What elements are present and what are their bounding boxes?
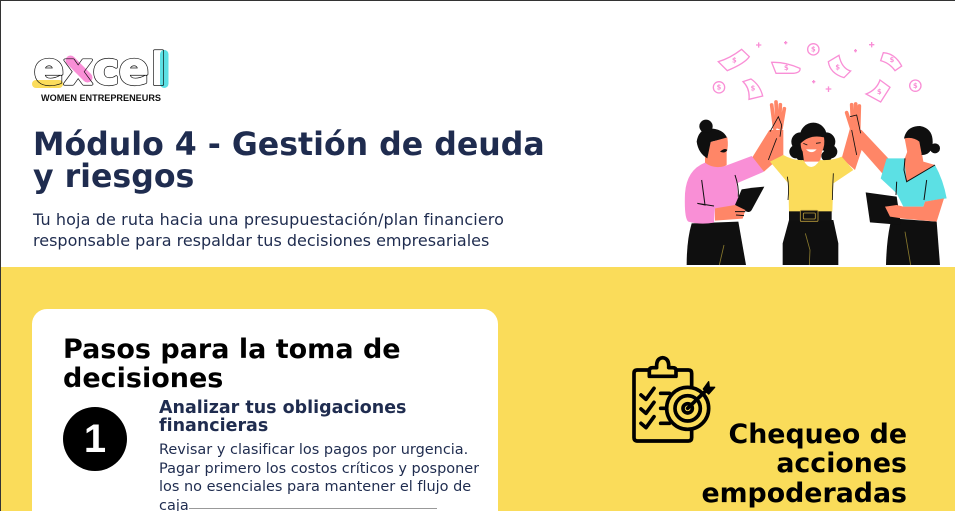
step heading	[159, 398, 406, 436]
clapping hands	[768, 102, 861, 160]
illustration: women high-fiving with flying money: $	[913, 82, 918, 90]
step number badge: 1	[84, 417, 106, 461]
heading: empowered actions check: empoderadas	[701, 478, 907, 509]
card heading: decisiones	[63, 363, 223, 394]
woman left	[685, 120, 785, 265]
step heading: financieras	[159, 416, 268, 436]
illustration: women high-fiving with flying money: $	[717, 84, 722, 92]
illustration: women high-fiving with flying money: $	[811, 46, 816, 54]
step description: Pagar primero los costos críticos y posponer	[159, 460, 479, 476]
title: Módulo 4 - Gestión de deuda	[33, 127, 545, 163]
step heading: Analizar tus obligaciones	[159, 398, 406, 418]
step description	[159, 442, 479, 511]
heading: empowered actions check	[701, 420, 907, 509]
woman right	[866, 126, 947, 265]
intro text: Tu hoja de ruta hacia una presupuestación/plan financiero	[33, 210, 504, 229]
flying money and sparkles	[713, 41, 921, 102]
heading: empowered actions check: acciones	[776, 448, 907, 479]
step number badge	[63, 407, 127, 471]
illustration: women high-fiving with flying money: $	[890, 56, 895, 64]
intro text	[32, 210, 504, 250]
illustration: women high-fiving with flying money: $	[877, 88, 882, 96]
yellow background band	[0, 267, 955, 511]
logo: excel women entrepreneurs: excel	[34, 44, 166, 95]
title	[33, 127, 545, 195]
card heading: Pasos para la toma de	[63, 334, 401, 365]
illustration: women high-fiving with flying money: $	[732, 56, 737, 64]
logo: excel women entrepreneurs: WOMEN ENTREPRENEURS	[41, 93, 161, 104]
illustration: women high-fiving with flying money: $	[835, 63, 840, 71]
title: y riesgos	[33, 159, 194, 195]
illustration: women high-fiving with flying money: $	[784, 64, 789, 72]
logo: excel women entrepreneurs: excel	[34, 44, 166, 95]
card heading	[63, 334, 401, 394]
step description: Revisar y clasificar los pagos por urgencia.	[159, 442, 468, 458]
panel: decision steps card	[32, 309, 498, 511]
intro text: responsable para respaldar tus decisiones empresariales	[33, 231, 489, 250]
step description: los no esenciales para mantener el flujo de	[159, 479, 471, 495]
woman center	[769, 123, 888, 265]
illustration: women high-fiving with flying money: $	[751, 85, 756, 93]
